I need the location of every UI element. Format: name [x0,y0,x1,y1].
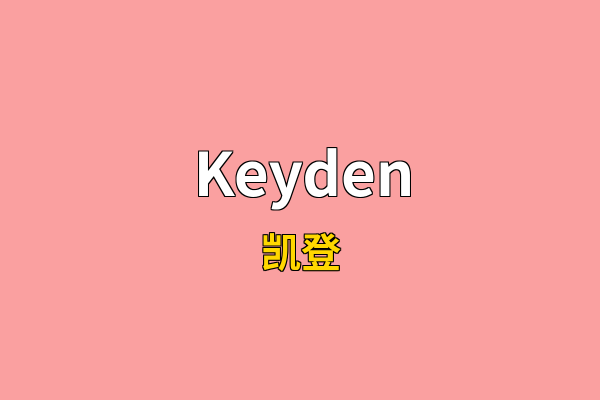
title: English name: Keyden [194,127,414,214]
subtitle: Chinese name: 凯登 [261,221,341,279]
